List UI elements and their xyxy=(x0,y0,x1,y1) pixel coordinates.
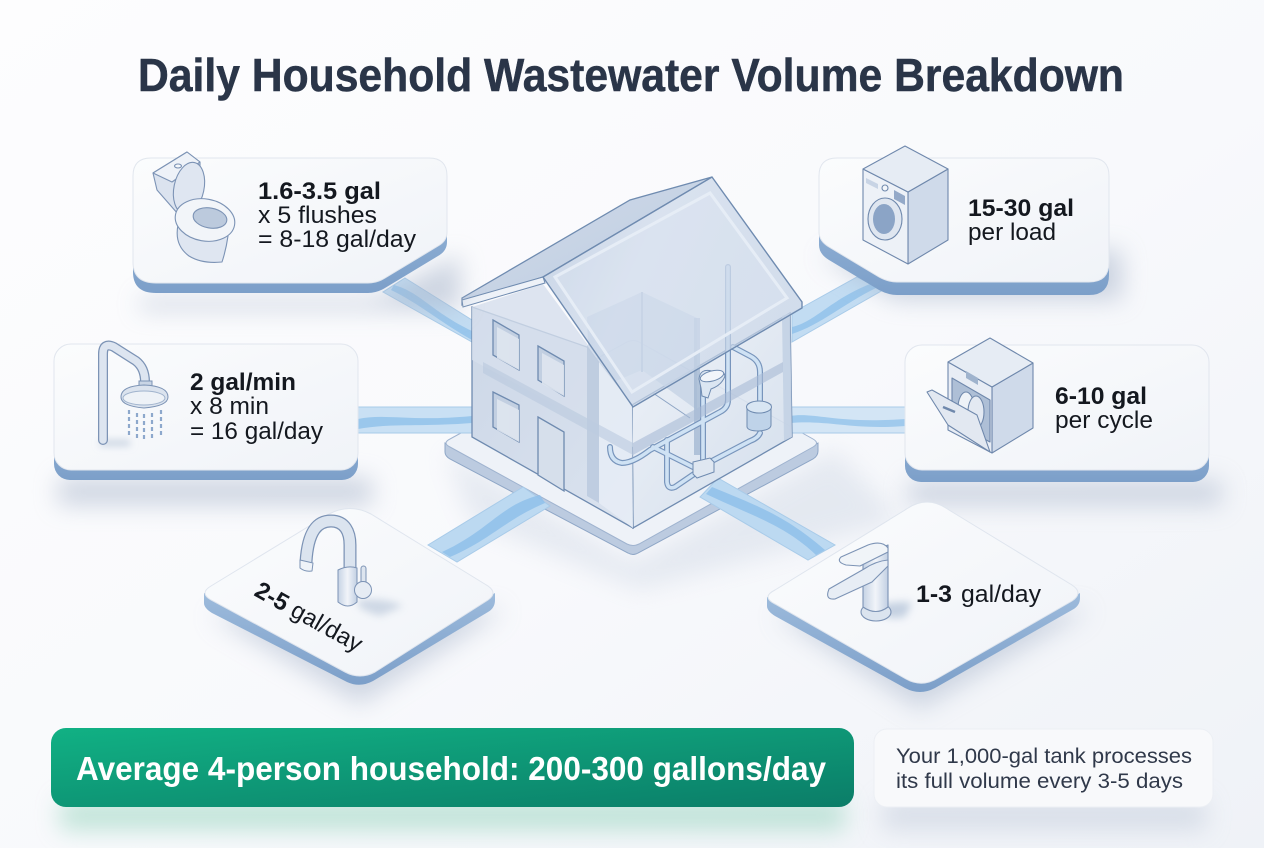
icon: toilet xyxy=(153,152,238,262)
roof inner pane xyxy=(555,193,787,392)
title: Daily Household Wastewater Volume Breakdown xyxy=(138,49,1124,101)
dishwasher text xyxy=(1055,383,1153,434)
platform: house base xyxy=(445,340,818,554)
panel: kitchen sink xyxy=(204,508,505,705)
shadow under house xyxy=(445,450,900,590)
shower text: x 8 min xyxy=(190,393,269,420)
panel: shower xyxy=(54,344,372,505)
callout: tank note: Your 1,000-gal tank processes xyxy=(896,745,1192,768)
front gable upper wall xyxy=(472,284,633,447)
washing machine text xyxy=(968,195,1074,246)
washing machine text: per load xyxy=(968,219,1056,246)
panel: washing machine xyxy=(819,146,1122,300)
bathroom sink text: 1-3 xyxy=(916,581,952,608)
windows and door xyxy=(493,320,564,491)
house xyxy=(462,177,802,528)
shower text xyxy=(190,369,323,445)
plumbing pipes xyxy=(610,267,760,488)
callout: average household: Average 4-person household: 200-300 gallons/day xyxy=(76,750,827,787)
toilet text: x 5 flushes xyxy=(258,202,377,229)
plumbing toilet xyxy=(699,368,725,398)
wall column xyxy=(587,345,599,503)
kitchen sink text: 2-5 gal/day xyxy=(250,577,367,658)
callout: tank note: its full volume every 3-5 days xyxy=(896,770,1183,793)
water channel: bathroom sink xyxy=(700,478,835,560)
shower text: = 16 gal/day xyxy=(190,418,323,445)
callout: average household xyxy=(51,728,854,830)
glass corner panel xyxy=(599,362,633,528)
right wall xyxy=(632,313,792,528)
icon: shower xyxy=(100,346,168,443)
bathroom sink text: gal/day xyxy=(961,581,1041,608)
right corner post xyxy=(782,313,792,441)
bathroom sink text xyxy=(916,581,1041,608)
water channel: dishwasher xyxy=(790,407,906,433)
water channel: toilet xyxy=(383,278,472,342)
roof left slope xyxy=(462,177,712,305)
toilet text: 1.6-3.5 gal xyxy=(258,178,381,205)
washing machine text: 15-30 gal xyxy=(968,195,1074,222)
icon: dishwasher xyxy=(927,338,1033,453)
panel: toilet xyxy=(133,152,460,310)
dishwasher text: 6-10 gal xyxy=(1055,383,1147,410)
left wall xyxy=(472,307,633,528)
icon: bathroom faucet xyxy=(828,543,912,621)
callout: tank note xyxy=(874,729,1213,830)
panel: bathroom sink xyxy=(767,502,1090,710)
plumbing tank xyxy=(746,401,772,431)
interior room seen through glass xyxy=(587,292,697,455)
roof eave left xyxy=(462,277,545,307)
water channel: shower xyxy=(358,407,472,433)
icon: washing machine xyxy=(863,146,948,264)
floor band right xyxy=(633,362,783,455)
icon: gooseneck faucet xyxy=(300,521,403,616)
roof glass pane xyxy=(543,177,802,407)
toilet text: = 8-18 gal/day xyxy=(258,226,416,253)
floor band left xyxy=(483,362,633,455)
water channel: washing machine xyxy=(792,277,883,342)
dishwasher text: per cycle xyxy=(1055,407,1153,434)
water channel: kitchen sink xyxy=(428,487,550,562)
toilet text xyxy=(258,178,416,253)
panel: dishwasher xyxy=(905,338,1222,506)
plumbing junction box xyxy=(693,458,714,478)
shower text: 2 gal/min xyxy=(190,369,296,396)
